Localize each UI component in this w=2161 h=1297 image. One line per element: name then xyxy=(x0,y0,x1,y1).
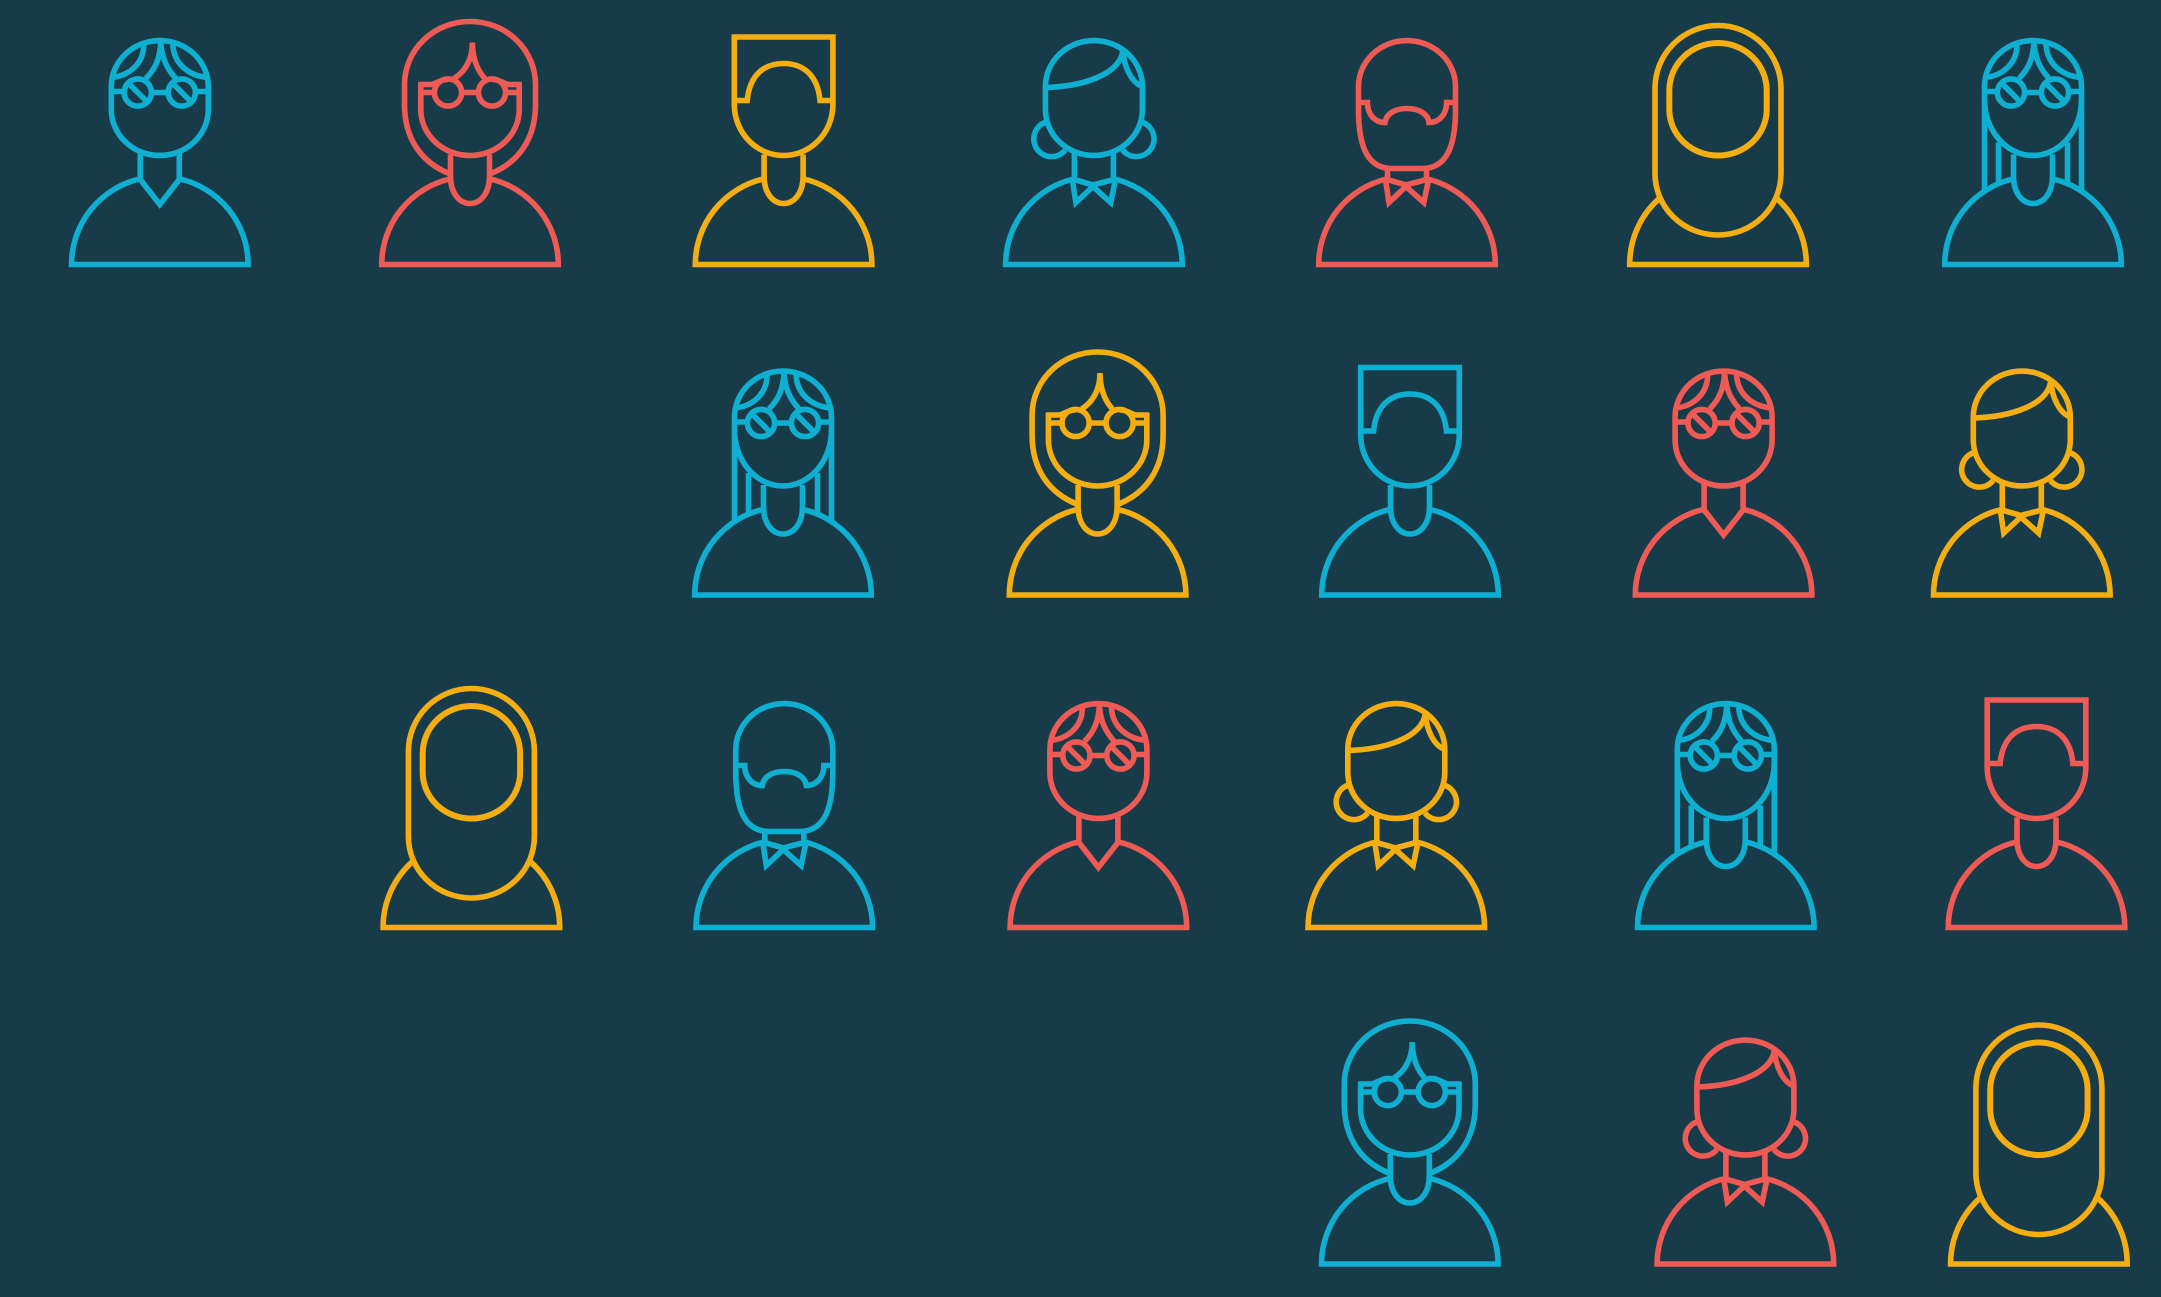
icon: red man with glasses and curly hair xyxy=(1635,371,1812,595)
icon: blue woman with bob and glasses xyxy=(1322,1021,1498,1264)
icon: yellow woman in hijab xyxy=(1951,1025,2127,1264)
icon: red man with glasses and curly hair xyxy=(1010,704,1187,928)
icon: blue long-haired woman with glasses xyxy=(1638,704,1814,928)
icon: yellow woman in hijab xyxy=(1630,26,1806,264)
icon: blue bearded man with bow collar xyxy=(696,704,873,928)
icon: red bearded man with bow collar xyxy=(1319,41,1495,264)
icon: blue man with glasses and curly hair xyxy=(72,41,248,264)
icon: blue woman with earrings and collar xyxy=(1006,41,1182,264)
icon: yellow woman in hijab xyxy=(383,688,560,928)
icon: red man with flat-top hair xyxy=(1948,700,2125,928)
icon: yellow woman with earrings and collar xyxy=(1308,704,1485,928)
icon: yellow woman with bob and glasses xyxy=(1009,352,1186,595)
icon: red woman with bob and glasses xyxy=(382,22,558,264)
icon: blue long-haired woman with glasses xyxy=(695,371,871,595)
icon: yellow woman with earrings and collar xyxy=(1934,371,2110,595)
icon: red woman with earrings and collar xyxy=(1657,1040,1834,1264)
icon: blue long-haired woman with glasses xyxy=(1945,41,2121,264)
icon: blue man with flat-top hair xyxy=(1322,368,1498,595)
icon: yellow man with flat-top hair xyxy=(695,37,872,264)
